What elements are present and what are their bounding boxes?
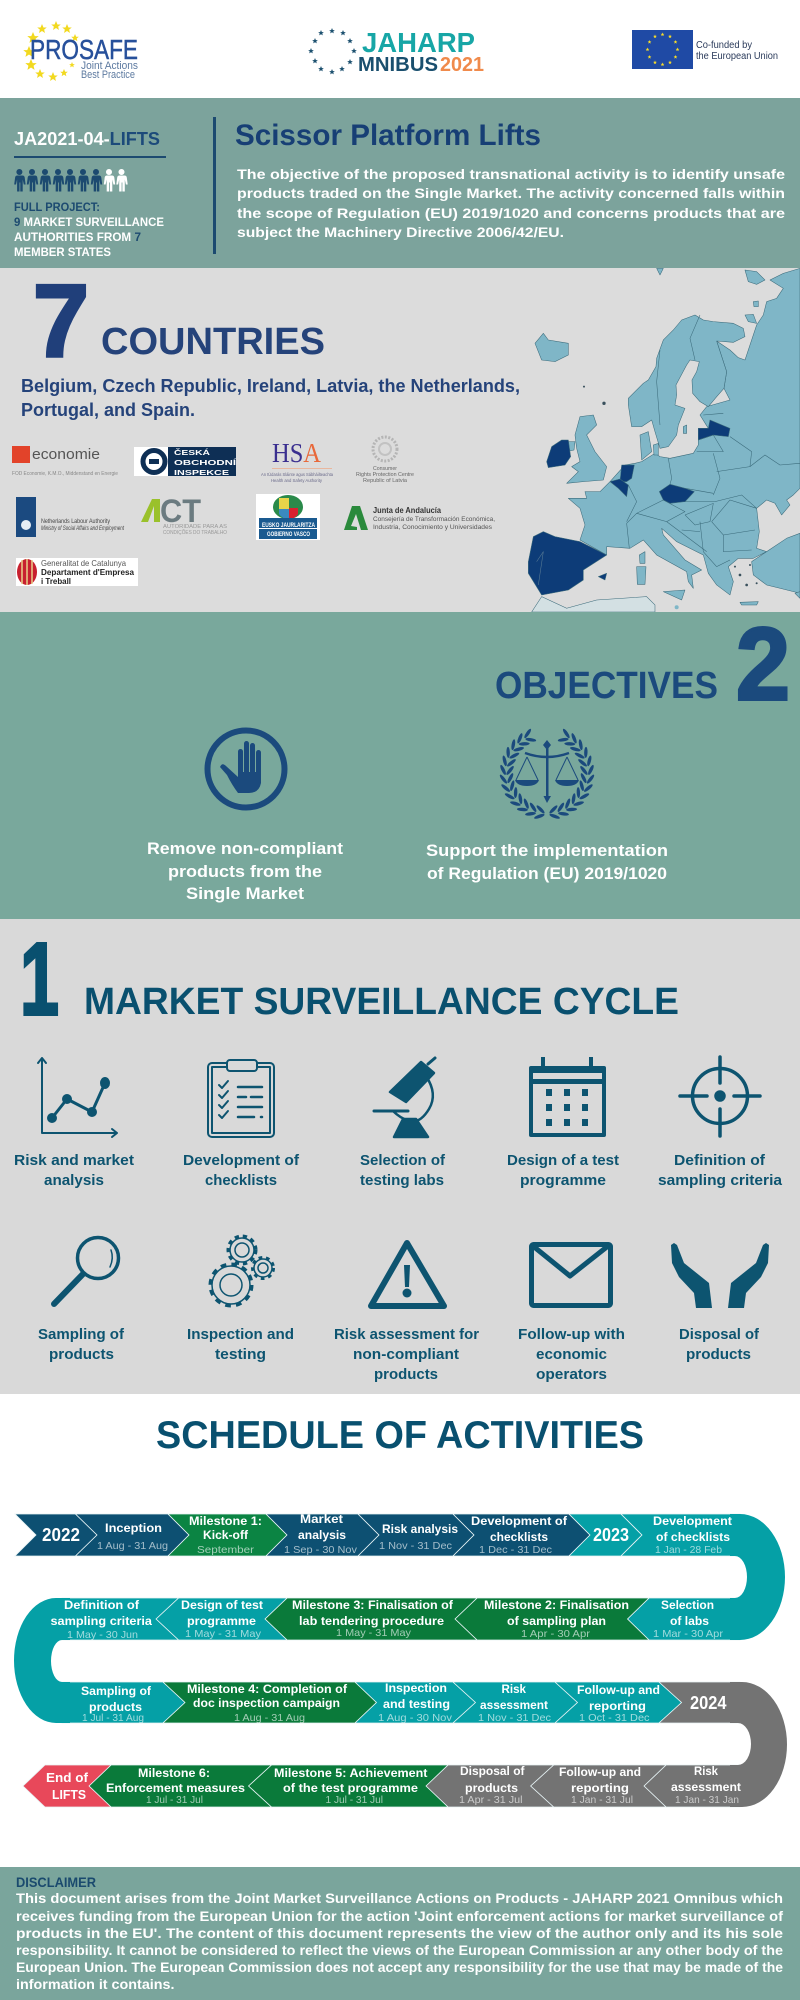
- row 1 labels: of checklists: [656, 1531, 730, 1544]
- row 4 labels: Enforcement measures: [106, 1782, 245, 1795]
- row 1 labels: checklists: [490, 1531, 548, 1544]
- row 3 labels: 1 Oct - 31 Dec: [579, 1712, 650, 1724]
- logo: PROSAFE: Joint Actions: [81, 60, 138, 72]
- label: risk and market analysis: analysis: [44, 1173, 104, 1189]
- row 1 labels: 2022: [42, 1525, 80, 1545]
- label: risk assessment: Risk assessment for: [334, 1327, 479, 1343]
- row 1 labels: 1 Jan - 28 Feb: [655, 1544, 722, 1556]
- row 2 labels: 1 May - 31 May: [185, 1628, 262, 1640]
- logo: Generalitat de Catalunya: Departament d'Empresa: [41, 567, 134, 577]
- row 2 labels: Definition of: [64, 1599, 139, 1612]
- label: follow-up with economic operators: Follow-up with: [518, 1327, 625, 1343]
- objective: remove products: Single Market: [186, 884, 304, 903]
- heading: schedule of activities: SCHEDULE OF ACTIVITIES: [156, 1414, 644, 1457]
- row 3 labels: 2024: [690, 1693, 726, 1713]
- label: sampling of products: products: [49, 1347, 114, 1363]
- row 3 labels: 1 Jul - 31 Aug: [82, 1712, 144, 1724]
- row 3 labels: [81, 1682, 726, 1724]
- row 2 labels: Milestone 3: Finalisation of: [292, 1599, 453, 1612]
- objective: support regulation: [426, 841, 668, 883]
- objective text: subject the Machinery Directive 2006/42/EU.: [237, 224, 564, 240]
- header logos: [23, 21, 778, 81]
- logo: Czech Trade Inspection: [134, 447, 237, 477]
- row 2 labels: lab tendering procedure: [299, 1615, 445, 1628]
- project code: JA2021-04-LIFTS: [14, 129, 160, 149]
- objective text: products traded on the Single Market. The activity concerned falls within: [237, 185, 785, 201]
- row 1 labels: Milestone 1:: [189, 1515, 262, 1528]
- row 2 labels: 1 Apr - 30 Apr: [521, 1628, 591, 1640]
- row 3 labels: Risk: [502, 1683, 527, 1696]
- logo: ACT: AUTORIDADE PARA AS: [163, 524, 227, 530]
- row 3 labels: Milestone 4: Completion of: [187, 1683, 347, 1696]
- row 3 labels: 1 Aug - 30 Nov: [378, 1712, 453, 1724]
- logo: Consumer Rights Protection Centre: Republic of Latvia: [363, 478, 408, 484]
- big number 7: 7: [33, 264, 89, 378]
- full project note: [14, 202, 164, 259]
- row 4 labels: Milestone 5: Achievement: [274, 1767, 428, 1780]
- row 1 labels: 1 Sep - 30 Nov: [284, 1544, 358, 1556]
- timeline: schedule: [14, 1513, 787, 1807]
- label: risk assessment: [334, 1327, 479, 1383]
- logo: Netherlands Labour Authority: Netherlands Labour Authority: [41, 519, 110, 525]
- logo: ACT: [141, 493, 228, 536]
- objective text: [237, 166, 785, 240]
- icon: envelope: [532, 1244, 610, 1306]
- label: inspection and testing: [187, 1327, 294, 1363]
- logo: JAHARP Omnibus 2021: 2021: [440, 54, 484, 76]
- big number 2: 2: [736, 606, 790, 722]
- row 1 labels: [42, 1513, 732, 1556]
- label: selection of testing labs: testing labs: [360, 1173, 444, 1189]
- row 2 labels: programme: [187, 1615, 257, 1628]
- row 3 labels: products: [89, 1701, 142, 1714]
- logo: Netherlands Labour Authority: Ministry of Social Affairs and Employment: [41, 526, 124, 532]
- label: disposal of products: Disposal of: [679, 1327, 759, 1343]
- row 3 labels: 1 Aug - 31 Aug: [234, 1712, 305, 1724]
- logo: ACT: CONDIÇÕES DO TRABALHO: [163, 529, 228, 536]
- disclaimer text: products in the EU'. The content of this document represents the view of the author only and its his sole: [16, 1926, 784, 1941]
- objective text: the scope of Regulation (EU) 2019/1020 and concerns products that are: [237, 205, 785, 221]
- disclaimer heading: DISCLAIMER: [16, 1874, 96, 1890]
- row 4 labels: 1 Apr - 31 Jul: [459, 1794, 522, 1806]
- row 4 labels: Milestone 6:: [138, 1767, 210, 1780]
- map of Europe: [528, 268, 800, 612]
- logo: EU co-funded: Co-funded by: [696, 40, 752, 51]
- label: sampling of products: [38, 1327, 124, 1363]
- logo: Czech Trade Inspection: ČESKÁ: [174, 448, 211, 457]
- label: definition of sampling criteria: sampling criteria: [658, 1173, 783, 1189]
- highlighted countries: [528, 420, 730, 595]
- row 4 labels: 1 Jul - 31 Jul: [146, 1794, 203, 1806]
- label: definition of sampling criteria: [658, 1153, 783, 1189]
- row 3 labels: Inspection: [385, 1682, 447, 1695]
- row 2 labels: Selection: [661, 1599, 714, 1612]
- row 4 labels: LIFTS: [52, 1787, 86, 1802]
- objective: remove products: [147, 839, 343, 903]
- row 1 labels: analysis: [298, 1529, 346, 1542]
- logo: Junta de Andalucia: Consejería de Transformación Económica,: [373, 516, 495, 523]
- label: follow-up with economic operators: economic: [536, 1347, 607, 1363]
- row 3 labels: assessment: [480, 1699, 548, 1712]
- logo: Netherlands Labour Authority: [16, 497, 124, 537]
- row 3 labels: 1 Nov - 31 Dec: [478, 1712, 551, 1724]
- full project note: AUTHORITIES FROM 7: [14, 232, 141, 244]
- row 4 labels: Risk: [694, 1765, 719, 1778]
- small islands: [583, 386, 758, 609]
- logo: Czech Trade Inspection: OBCHODNÍ: [174, 458, 237, 467]
- heading: cycle: MARKET SURVEILLANCE CYCLE: [84, 981, 679, 1023]
- row 4 labels: assessment: [671, 1781, 741, 1794]
- row 1 labels: Market: [300, 1513, 343, 1526]
- row 4 labels: of the test programme: [283, 1782, 419, 1795]
- objective: remove products: Remove non-compliant: [147, 839, 343, 858]
- country list: Portugal, and Spain.: [21, 399, 195, 420]
- disclaimer text: receives funding from the European Union for the action 'Joint enforcement actions for market surveillance of: [16, 1909, 784, 1924]
- teal curve left: [14, 1598, 70, 1723]
- disclaimer text: responsibility. It cannot be considered to reflect the views of the European Commission ar any other body of the: [16, 1943, 784, 1958]
- logo: HSA: An tÚdarás Sláinte agus Sábháilteachta: [261, 471, 333, 477]
- label: follow-up with economic operators: [518, 1327, 625, 1383]
- country list: [21, 375, 520, 420]
- row 1 labels: 1 Nov - 31 Dec: [379, 1540, 452, 1552]
- logo: JAHARP Omnibus 2021: MNIBUS: [358, 54, 438, 76]
- logo: PROSAFE: PROSAFE: [30, 34, 138, 65]
- icon: calendar: [529, 1057, 606, 1137]
- logo: Junta de Andalucia: Junta de Andalucía: [373, 506, 442, 515]
- logo: EU co-funded: [632, 30, 778, 69]
- row 4 labels: 1 Jul - 31 Jul: [326, 1794, 383, 1806]
- row 1 labels: 2023: [593, 1525, 629, 1545]
- objective text: The objective of the proposed transnational activity is to identify unsafe: [237, 166, 785, 182]
- row 4 labels: End of: [46, 1770, 89, 1785]
- label: definition of sampling criteria: Definition of: [674, 1153, 765, 1169]
- logo: Basque Government: EUSKO JAURLARITZA: [262, 523, 316, 529]
- logo: HSA: Health and Safety Authority: [271, 478, 323, 483]
- label: inspection and testing: testing: [215, 1347, 266, 1363]
- row 2 labels: sampling criteria: [50, 1615, 153, 1628]
- label: sampling of products: Sampling of: [38, 1327, 124, 1343]
- logo: Basque Government: GOBIERNO VASCO: [267, 532, 310, 538]
- logo: PROSAFE: Best Practice: [81, 69, 135, 81]
- row 1 labels: 1 Dec - 31 Dec: [479, 1544, 552, 1556]
- label: disposal of products: [679, 1327, 759, 1363]
- row 4 labels: reporting: [571, 1782, 629, 1795]
- row 1 labels: Development: [653, 1515, 732, 1528]
- row 2 labels: of labs: [670, 1615, 709, 1628]
- row 3 labels: and testing: [383, 1698, 450, 1711]
- row 4 labels: [46, 1765, 741, 1806]
- panel: disclaimer: [0, 1867, 800, 2000]
- row 4 labels: Disposal of: [460, 1765, 525, 1778]
- logo: Consumer Rights Protection Centre: Rights Protection Centre: [356, 472, 414, 478]
- label: design of a test programme: programme: [520, 1173, 606, 1189]
- panel: objectives: [0, 606, 800, 919]
- row 1 labels: 1 Aug - 31 Aug: [97, 1540, 168, 1552]
- row 4 labels: 1 Jan - 31 Jan: [675, 1794, 739, 1806]
- logo: economie: FOD Economie, K.M.O., Middenstand en Energie: [12, 471, 118, 477]
- icon: chart: [38, 1058, 117, 1137]
- row 1 arrows: [15, 1514, 740, 1556]
- row 3 labels: Sampling of: [81, 1685, 151, 1698]
- row 2 labels: Milestone 2: Finalisation: [484, 1599, 629, 1612]
- objective: support regulation: of Regulation (EU) 2019/1020: [427, 864, 667, 883]
- label: selection of testing labs: [360, 1153, 445, 1189]
- logo: Junta de Andalucia: [344, 506, 495, 531]
- logo: Czech Trade Inspection: INSPEKCE: [174, 468, 229, 477]
- logo: Generalitat de Catalunya: Generalitat de Catalunya: [41, 558, 126, 568]
- row 4 arrows: [23, 1765, 740, 1807]
- objective: support regulation: Support the implementation: [426, 841, 668, 860]
- logo: Consumer Rights Protection Centre: [356, 437, 414, 484]
- gray curve right: [730, 1682, 787, 1807]
- row 1 labels: Risk analysis: [382, 1523, 458, 1536]
- logo: Basque Government: [256, 494, 320, 540]
- logo: Junta de Andalucia: Industria, Conocimiento y Universidades: [373, 524, 493, 531]
- label: disposal of products: products: [686, 1347, 751, 1363]
- label: follow-up with economic operators: operators: [536, 1367, 607, 1383]
- icon: magnifier: [54, 1238, 118, 1304]
- label: risk and market analysis: Risk and market: [14, 1153, 134, 1169]
- label: development of checklists: checklists: [205, 1173, 277, 1189]
- logo: ACT: CT: [160, 493, 201, 529]
- borders: [537, 315, 800, 585]
- title: Scissor Platform Lifts: [235, 119, 541, 152]
- logo: JAHARP Omnibus 2021: JAHARP: [362, 27, 475, 58]
- row 2 labels: 1 May - 30 Jun: [67, 1629, 138, 1641]
- label: inspection and testing: Inspection and: [187, 1327, 294, 1343]
- icon: open hands: [671, 1243, 769, 1308]
- icon: gears: [211, 1237, 273, 1305]
- logo: economie: economie: [32, 446, 100, 463]
- row 4 labels: Follow-up and: [559, 1766, 641, 1779]
- logo: HSA: [261, 438, 333, 483]
- logo: EU co-funded: the European Union: [696, 51, 778, 62]
- full project note: 9 MARKET SURVEILLANCE: [14, 217, 164, 229]
- logo: economie: [12, 446, 118, 477]
- panel: countries: [0, 264, 800, 612]
- logo: PROSAFE: [23, 21, 138, 81]
- north Africa: [532, 597, 655, 612]
- icon: scales in laurel wreath: [498, 727, 596, 821]
- disclaimer text: information it contains.: [16, 1977, 174, 1992]
- icon: stop hand: [208, 730, 284, 808]
- row 3 arrows: [62, 1682, 740, 1723]
- icon: nine people: [14, 169, 128, 192]
- label: risk assessment: non-compliant: [353, 1347, 459, 1363]
- row 2 arrows: [62, 1598, 740, 1640]
- disclaimer text: European Union. The European Commission does not accept any responsibility for the use that may be made of the: [16, 1960, 783, 1975]
- row 2 labels: 1 Mar - 30 Apr: [653, 1628, 724, 1640]
- heading: objectives: OBJECTIVES: [495, 665, 718, 707]
- icon: target: [680, 1057, 760, 1136]
- row 1 labels: Development of: [471, 1515, 567, 1528]
- label: risk and market analysis: [14, 1153, 134, 1189]
- row 2 labels: of sampling plan: [507, 1615, 606, 1628]
- row 2 labels: 1 May - 31 May: [336, 1627, 412, 1639]
- country list: Belgium, Czech Republic, Ireland, Latvia, the Netherlands,: [21, 375, 520, 396]
- objective: remove products: products from the: [168, 862, 322, 881]
- row 4 labels: products: [465, 1782, 518, 1795]
- logo: HSA: HSA: [272, 438, 321, 468]
- logo: Generalitat de Catalunya: [16, 558, 138, 586]
- row 1 labels: Kick-off: [203, 1529, 248, 1542]
- row 1 labels: Inception: [105, 1522, 162, 1535]
- teal curve right: [730, 1514, 785, 1640]
- label: development of checklists: Development of: [183, 1153, 299, 1169]
- row 3 labels: doc inspection campaign: [193, 1697, 340, 1710]
- label: design of a test programme: [507, 1153, 619, 1189]
- label: development of checklists: [183, 1153, 299, 1189]
- disclaimer text: This document arises from the Joint Market Surveillance Actions on Products - JAHARP 2021 Omnibus which: [16, 1891, 783, 1906]
- big number 1: 1: [20, 922, 59, 1036]
- disclaimer text: [16, 1891, 784, 1992]
- label: design of a test programme: Design of a test: [507, 1153, 619, 1169]
- panel: project intro: [0, 98, 800, 268]
- logo: Generalitat de Catalunya: i Treball: [41, 576, 71, 586]
- full project note: MEMBER STATES: [14, 247, 111, 259]
- row 2 labels: Design of test: [181, 1599, 263, 1612]
- label: selection of testing labs: Selection of: [360, 1153, 445, 1169]
- row 1 labels: September: [197, 1544, 255, 1556]
- icon: microscope: [374, 1058, 435, 1137]
- heading: countries: COUNTRIES: [101, 321, 325, 363]
- label: risk assessment: products: [374, 1367, 438, 1383]
- row 2 labels: [50, 1599, 724, 1641]
- row 3 labels: reporting: [589, 1700, 646, 1713]
- row 3 labels: Follow-up and: [577, 1684, 660, 1697]
- icon: warning triangle: [371, 1243, 444, 1306]
- logo: Consumer Rights Protection Centre: Consumer: [373, 466, 397, 472]
- panel: market surveillance cycle: [0, 919, 800, 1394]
- row 4 labels: 1 Jan - 31 Jul: [571, 1794, 633, 1806]
- full project note: FULL PROJECT:: [14, 202, 100, 214]
- icon: checklist clipboard: [208, 1060, 274, 1137]
- logo: JAHARP Omnibus 2021: [308, 27, 484, 76]
